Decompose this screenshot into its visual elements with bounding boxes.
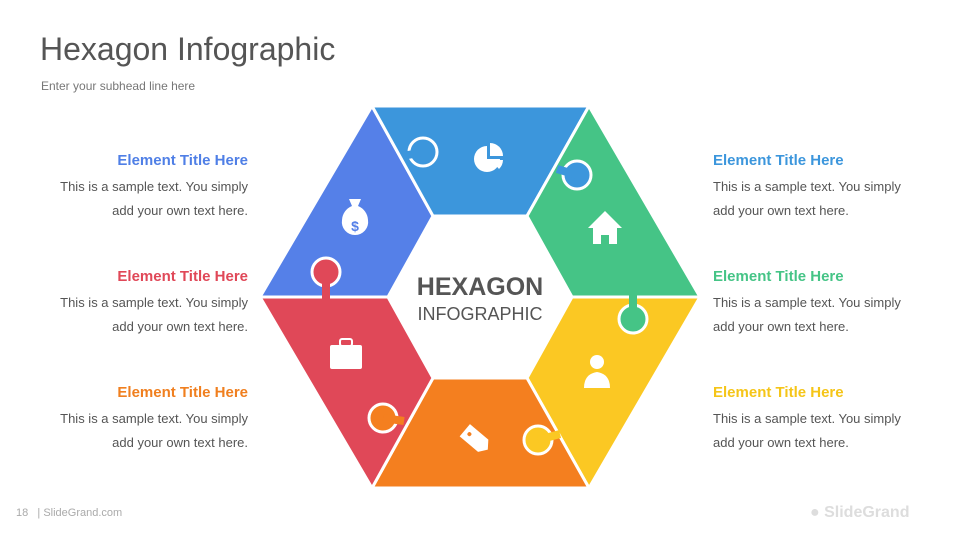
text block: left 3: This is a sample text. You simply (60, 411, 248, 426)
title: Hexagon Infographic (40, 31, 335, 67)
icon: person (584, 355, 610, 388)
text block: left 2 (60, 268, 248, 334)
text block: left 3: Element Title Here (117, 384, 248, 401)
text block: right 3: add your own text here. (713, 435, 849, 450)
text block: right 2 (713, 268, 901, 334)
footer: 18 | SlideGrand.com (16, 507, 122, 519)
footer logo: ● SlideGrand (810, 504, 909, 521)
text block: right 3: This is a sample text. You simply (713, 411, 901, 426)
center label: HEXAGON (417, 273, 543, 301)
text block: left 2: add your own text here. (112, 319, 248, 334)
text block: right 1: Element Title Here (713, 152, 844, 169)
text block: left 3 (60, 384, 248, 450)
segment: red (260, 297, 433, 488)
text block: left 2: Element Title Here (117, 268, 248, 285)
text block: right 1: This is a sample text. You simply (713, 179, 901, 194)
center label: INFOGRAPHIC (417, 304, 543, 324)
subhead: Enter your subhead line here (41, 79, 195, 93)
knobs (312, 138, 647, 454)
icon: money bag: $ (351, 218, 359, 234)
icon: pie chart (474, 143, 503, 172)
segment: yellow (527, 297, 700, 488)
icon: briefcase (330, 339, 362, 369)
text block: left 3: add your own text here. (112, 435, 248, 450)
segment: green (527, 106, 700, 297)
segment: purple (260, 106, 433, 297)
text block: right 1: add your own text here. (713, 203, 849, 218)
text block: right 3 (713, 384, 901, 450)
text block: right 2: add your own text here. (713, 319, 849, 334)
segment: orange (372, 378, 589, 488)
text block: left 1: add your own text here. (112, 203, 248, 218)
text block: left 1: This is a sample text. You simply (60, 179, 248, 194)
text block: right 2: This is a sample text. You simply (713, 295, 901, 310)
center label (417, 273, 543, 324)
icon: tag (460, 424, 493, 456)
icon: house (588, 211, 622, 244)
icon: money bag (342, 199, 368, 235)
text block: left 1: Element Title Here (117, 152, 248, 169)
text block: left 2: This is a sample text. You simply (60, 295, 248, 310)
segment: blue (372, 106, 589, 216)
text block: left 1 (60, 152, 248, 218)
text block: right 3: Element Title Here (713, 384, 844, 401)
text block: right 2: Element Title Here (713, 268, 844, 285)
text block: right 1 (713, 152, 901, 218)
